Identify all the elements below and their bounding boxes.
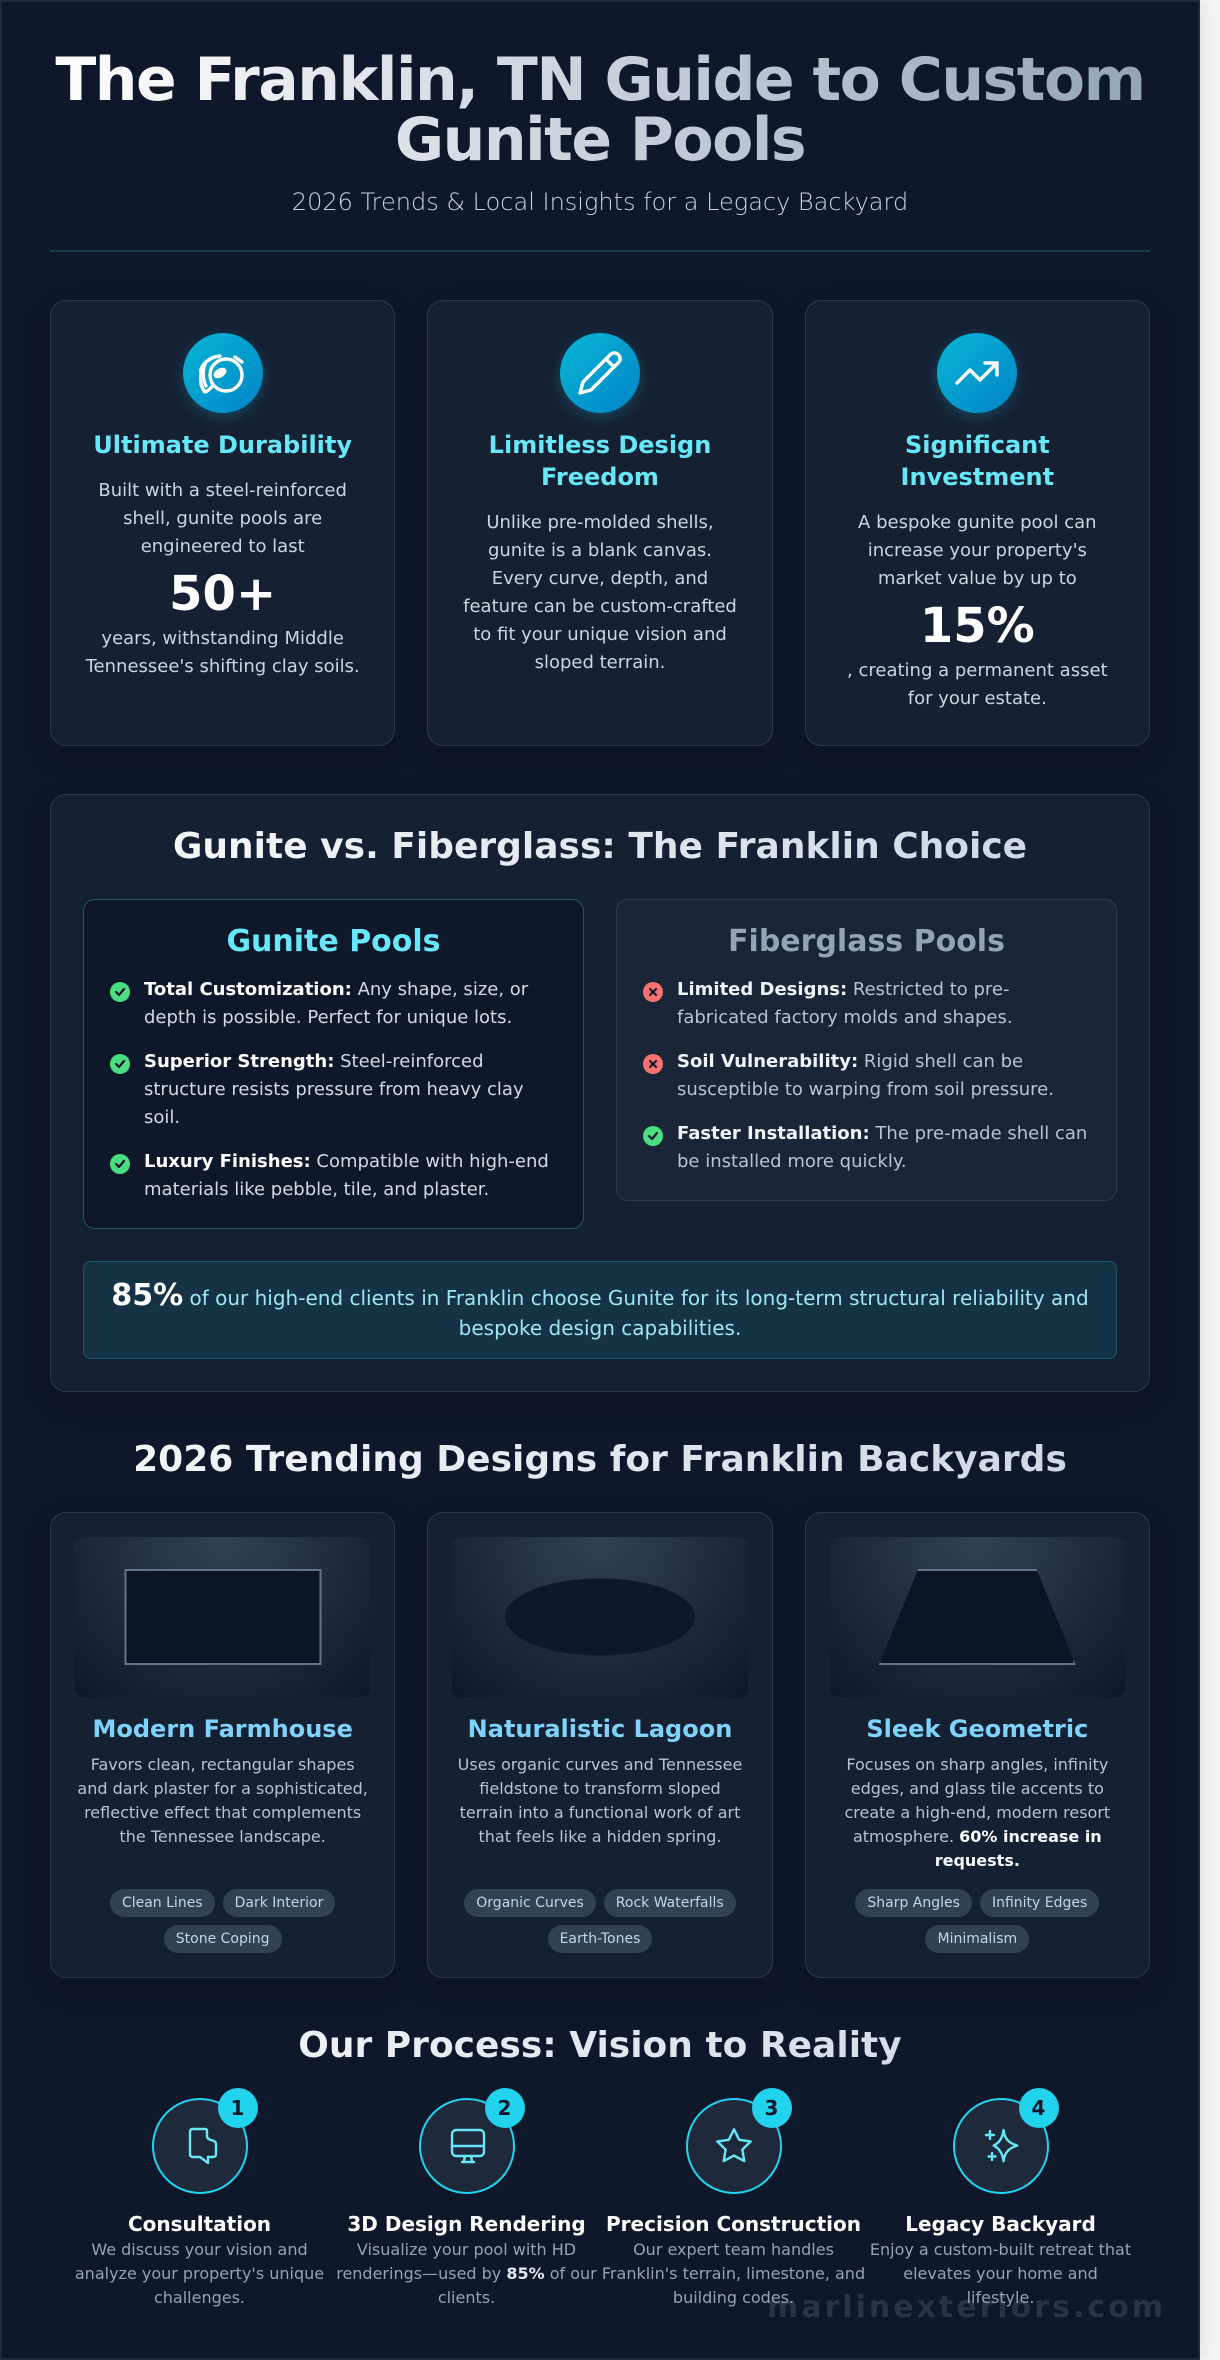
header (50, 50, 1150, 252)
description (602, 2240, 865, 2307)
process heading: Our Process: Vision to Reality (298, 2025, 902, 2066)
trending designs heading: 2026 Trending Designs for Franklin Backyards (133, 1439, 1067, 1480)
gunite list: Superior Strength: Steel-reinforced structure resists pressure from heavy clay soil. (144, 1051, 524, 1128)
description: renderings—used by 85% of our (336, 2264, 597, 2283)
text with 50+ stat: 50+ (169, 566, 276, 622)
description: Franklin's terrain, limestone, and (602, 2264, 865, 2283)
text with 50+ stat: Built with a steel-reinforced shell, gunite pools are engineered to last years, withstanding Middle Tennessee's shifting clay soils. (86, 480, 360, 677)
icon: sparkles with badge 4: 4 (1032, 2096, 1045, 2120)
title: Precision Construction (606, 2212, 861, 2236)
tags (110, 1889, 335, 1953)
heading: Fiberglass Pools (728, 924, 1005, 959)
process heading (50, 2026, 1150, 2066)
tags: Rock Waterfalls (616, 1895, 724, 1911)
description: lifestyle. (967, 2288, 1034, 2307)
description: building codes. (673, 2288, 794, 2307)
description: Our expert team handles (633, 2240, 834, 2259)
tags (464, 1889, 736, 1953)
fiberglass list: Limited Designs: Restricted to pre-fabricated factory molds and shapes. (677, 979, 1013, 1028)
gunite list (110, 979, 549, 1200)
icon: durability shield (183, 333, 263, 413)
tags: Infinity Edges (992, 1895, 1087, 1911)
comparison heading: Gunite vs. Fiberglass: The Franklin Choice (173, 826, 1027, 867)
description: elevates your home and (903, 2264, 1098, 2283)
description (75, 2240, 324, 2307)
card: naturalistic lagoon (427, 1512, 773, 1978)
heading: Limitless Design Freedom (489, 431, 711, 491)
watermark: marlinexteriors.com (767, 2290, 1166, 2325)
subtitle: 2026 Trends & Local Insights for a Legacy Backyard (292, 188, 908, 216)
text: Unlike pre-molded shells, gunite is a blank canvas. Every curve, depth, and feature can be custom-crafted to fit your unique vision and sloped terrain. (463, 512, 737, 673)
callout: 85% stat: 85% of our high-end clients in Franklin choose Gunite for its long-term structural reliability and bespoke design capabilities. (111, 1278, 1089, 1340)
description: analyze your property's unique (75, 2264, 324, 2283)
card: modern farmhouse (50, 1512, 395, 1978)
gunite list: Luxury Finishes: Compatible with high-end materials like pebble, tile, and plaster. (144, 1151, 549, 1200)
fiberglass list: Soil Vulnerability: Rigid shell can be susceptible to warping from soil pressure. (677, 1051, 1054, 1100)
heading: Sleek Geometric (866, 1715, 1088, 1743)
icon: consultation bubble with badge 1 (152, 2098, 248, 2194)
tags (855, 1889, 1099, 1953)
tags: Minimalism (937, 1931, 1017, 1947)
callout: 85% stat (83, 1261, 1117, 1359)
icon: monitor with badge 2: 2 (498, 2096, 511, 2120)
gunite list: Total Customization: Any shape, size, or depth is possible. Perfect for unique lots. (144, 979, 528, 1028)
icon: consultation bubble with badge 1: 1 (231, 2096, 244, 2120)
icon: pencil (560, 333, 640, 413)
illustration: rectangular pool (75, 1537, 370, 1697)
heading: Naturalistic Lagoon (468, 1715, 732, 1743)
tags: Earth-Tones (560, 1931, 640, 1947)
title: 3D Design Rendering (347, 2212, 586, 2236)
heading: Modern Farmhouse (92, 1715, 353, 1743)
description: challenges. (154, 2288, 245, 2307)
text with 15% stat: 15% (920, 598, 1035, 654)
card: significant investment (805, 300, 1150, 746)
tags: Organic Curves (476, 1895, 584, 1911)
panel: gunite vs fiberglass (50, 794, 1150, 1392)
description: Uses organic curves and Tennessee fieldstone to transform sloped terrain into a functional work of art that feels like a hidden spring. (458, 1755, 742, 1846)
comparison columns (83, 899, 1117, 1229)
text with 15% stat: A bespoke gunite pool can increase your property's market value by up to , creating a permanent asset for your estate. (847, 512, 1108, 709)
tags: Stone Coping (176, 1931, 270, 1947)
panel: process steps (75, 2088, 1131, 2307)
description: clients. (438, 2288, 495, 2307)
description: Enjoy a custom-built retreat that (870, 2240, 1131, 2259)
step 2 (336, 2088, 597, 2307)
icon: monitor with badge 2 (418, 2098, 514, 2194)
panel: fiberglass pools (616, 899, 1117, 1201)
card: ultimate durability (50, 300, 395, 746)
description: Focuses on sharp angles, infinity edges, and glass tile accents to create a high-end, modern resort atmosphere. 60% increase in requests. (844, 1755, 1110, 1870)
step 3 (602, 2088, 865, 2307)
heading: Gunite Pools (226, 924, 441, 959)
tags: Clean Lines (122, 1895, 203, 1911)
icon: sparkles with badge 4 (952, 2098, 1048, 2194)
description: Favors clean, rectangular shapes and dark plaster for a sophisticated, reflective effect that complements the Tennessee landscape. (77, 1755, 368, 1846)
tags: Sharp Angles (867, 1895, 960, 1911)
icon: star with badge 3: 3 (765, 2096, 778, 2120)
description: Visualize your pool with HD (357, 2240, 576, 2259)
card: sleek geometric (805, 1512, 1150, 1978)
panel: trending designs (50, 1512, 1150, 1978)
title: Consultation (128, 2212, 271, 2236)
panel: key benefits (50, 300, 1150, 746)
heading: Ultimate Durability (93, 431, 352, 459)
description (336, 2240, 597, 2307)
panel: gunite pools (83, 899, 584, 1229)
card: limitless design freedom (427, 300, 773, 746)
icon: trending up (937, 333, 1017, 413)
description: We discuss your vision and (91, 2240, 308, 2259)
step 4 (870, 2088, 1131, 2307)
title: Legacy Backyard (905, 2212, 1096, 2236)
fiberglass list (643, 979, 1087, 1172)
description (870, 2240, 1131, 2307)
heading: Significant Investment (901, 431, 1054, 491)
icon: star with badge 3 (686, 2098, 782, 2194)
step 1 (75, 2088, 324, 2307)
illustration: trapezoid pool (830, 1537, 1125, 1697)
illustration: lagoon pool (452, 1537, 748, 1697)
title: The Franklin, TN Guide to Custom Gunite Pools (55, 45, 1145, 175)
fiberglass list: Faster Installation: The pre-made shell can be installed more quickly. (677, 1123, 1087, 1172)
tags: Dark Interior (235, 1895, 323, 1911)
